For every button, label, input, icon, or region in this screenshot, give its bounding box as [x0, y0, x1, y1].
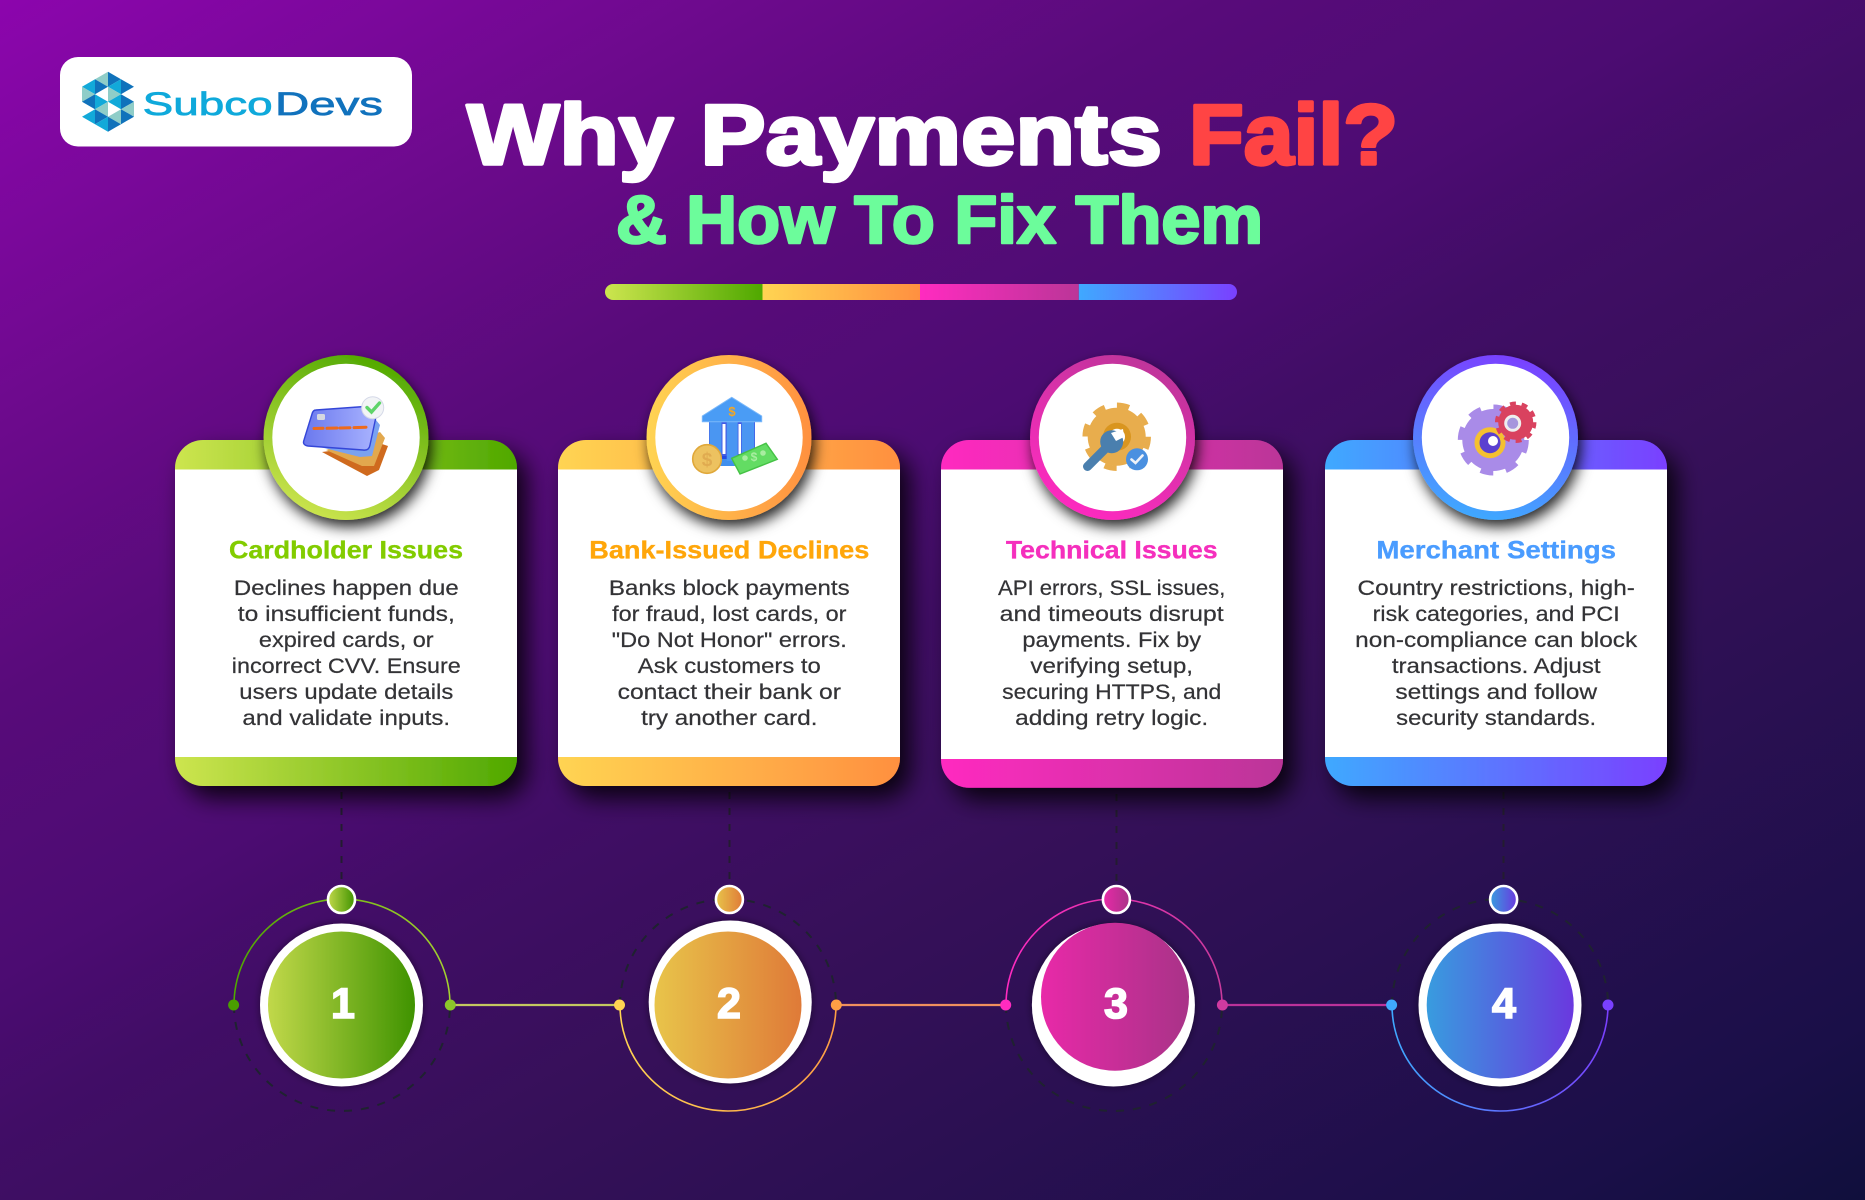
- timeline connector lines: [450, 1004, 1392, 1006]
- text block: [1355, 576, 1637, 730]
- text block: Ask customers to: [638, 654, 821, 678]
- icon: hexagon S mark: [82, 72, 134, 132]
- text block: and validate inputs.: [242, 706, 450, 730]
- text block: [998, 576, 1225, 730]
- number 1: 1: [331, 980, 355, 1028]
- text block: payments. Fix by: [1022, 628, 1201, 652]
- icon: stacked credit cards: [304, 397, 388, 476]
- text block: [232, 576, 461, 730]
- text block: adding retry logic.: [1015, 706, 1208, 730]
- text block: try another card.: [641, 706, 817, 730]
- subtitle: & How To Fix Them: & How To Fix Them: [616, 182, 1263, 258]
- logo wordmark: Subco: [143, 86, 273, 122]
- heading: Technical Issues: [1006, 536, 1218, 564]
- title: Why Payments Fail?: Fail?: [1189, 88, 1398, 183]
- number 2: 2: [717, 980, 741, 1028]
- text block: API errors, SSL issues,: [998, 576, 1225, 600]
- text block: Country restrictions, high-: [1358, 576, 1635, 600]
- text block: [609, 576, 850, 730]
- text block: security standards.: [1396, 706, 1596, 730]
- icon: purple and red gears: [1460, 403, 1535, 473]
- panel: Technical Issues: [941, 355, 1283, 788]
- icon: bank with coin and cash: $: [728, 404, 736, 419]
- panel: Bank-Issued Declines: [558, 355, 900, 786]
- text block: securing HTTPS, and: [1002, 680, 1221, 704]
- heading: Bank-Issued Declines: [589, 536, 869, 564]
- text block: non-compliance can block: [1355, 628, 1637, 652]
- icon: bank with coin and cash: $: [751, 450, 758, 464]
- text block: Declines happen due: [234, 576, 459, 600]
- dashed connectors from cards to steps: [342, 792, 1504, 886]
- icon: gear with wrench: [1085, 405, 1148, 470]
- text block: "Do Not Honor" errors.: [612, 628, 847, 652]
- step 3: [1000, 886, 1228, 1111]
- step 1: [228, 886, 456, 1111]
- text block: transactions. Adjust: [1392, 654, 1601, 678]
- step 2: [614, 886, 842, 1111]
- text block: expired cards, or: [259, 628, 434, 652]
- step 4: [1386, 886, 1614, 1111]
- title: Why Payments Fail?: [467, 88, 1398, 183]
- logo: SubcoDevs: Devs: [275, 86, 383, 122]
- text block: to insufficient funds,: [238, 602, 455, 626]
- heading: Cardholder Issues: [229, 536, 463, 564]
- gradient divider bar: [605, 284, 1237, 300]
- text block: and timeouts disrupt: [1000, 602, 1224, 626]
- icon: bank with coin and cash: $: [702, 450, 713, 471]
- panel: Merchant Settings: [1325, 355, 1667, 786]
- logo: SubcoDevs: [60, 57, 412, 146]
- text block: users update details: [239, 680, 453, 704]
- text block: for fraud, lost cards, or: [612, 602, 846, 626]
- text block: risk categories, and PCI: [1373, 602, 1620, 626]
- text block: contact their bank or: [618, 680, 841, 704]
- text block: Banks block payments: [609, 576, 850, 600]
- number 3: 3: [1104, 980, 1128, 1028]
- text block: settings and follow: [1395, 680, 1598, 704]
- text block: verifying setup,: [1030, 654, 1193, 678]
- panel: Cardholder Issues: [175, 355, 517, 786]
- text block: incorrect CVV. Ensure: [232, 654, 461, 678]
- icon: bank with coin and cash: [693, 397, 777, 474]
- number 4: 4: [1492, 980, 1516, 1028]
- title: Why Payments Fail?: Why Payments: [467, 88, 1162, 183]
- heading: Merchant Settings: [1376, 536, 1616, 564]
